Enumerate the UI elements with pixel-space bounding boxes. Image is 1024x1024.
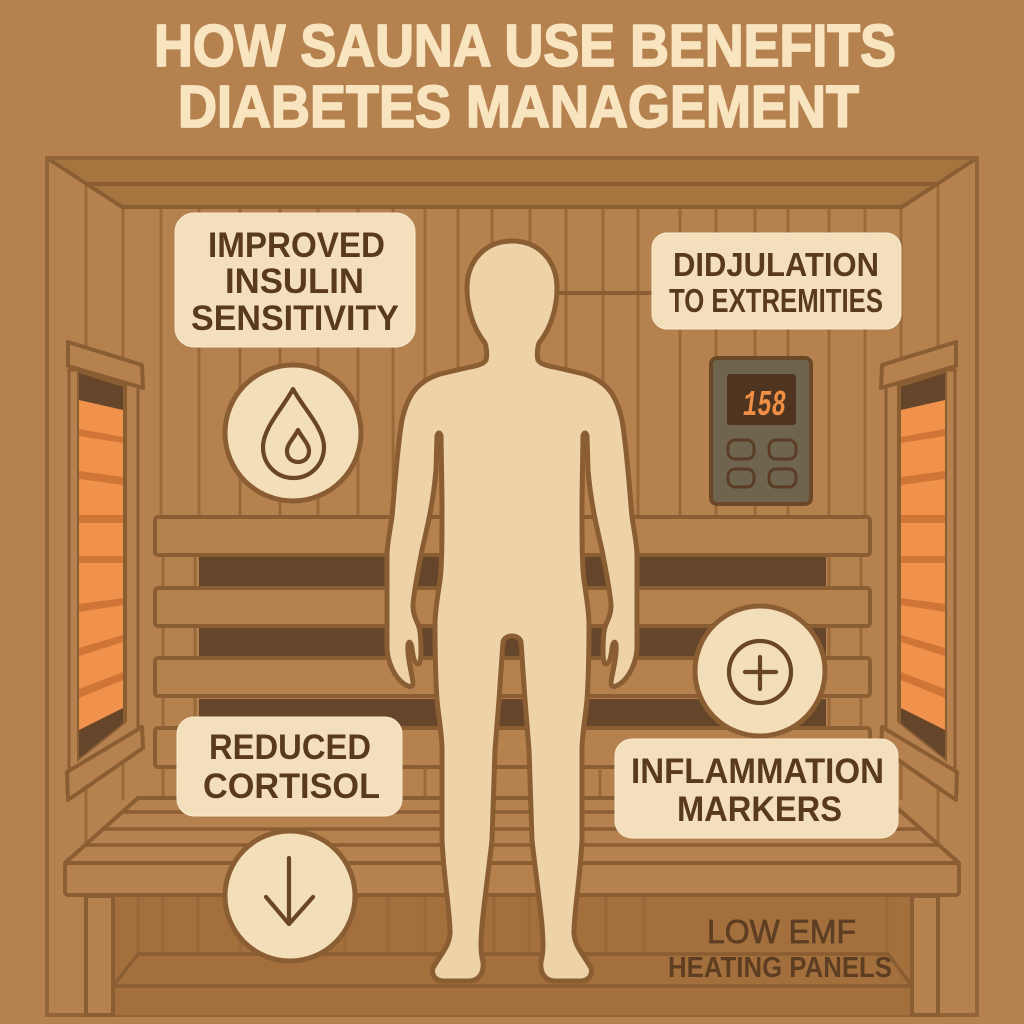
under-bench area <box>86 896 938 1015</box>
callout: improved insulin sensitivity: SENSITIVITY <box>191 299 399 338</box>
side walls <box>86 184 938 1015</box>
right heating panel <box>881 342 957 800</box>
callout: improved insulin sensitivity <box>175 213 415 347</box>
icon: water drop <box>225 365 361 501</box>
back wall <box>122 207 902 802</box>
callout: inflammation markers: INFLAMMATION <box>631 752 884 791</box>
wall benches <box>155 517 870 800</box>
icon: plus in circle <box>695 606 825 736</box>
sauna room <box>47 158 977 1015</box>
callout: reduced cortisol: CORTISOL <box>203 767 380 806</box>
sauna thermostat control panel <box>711 358 811 504</box>
title: DIABETES MANAGEMENT <box>178 74 859 140</box>
sauna thermostat control panel: 158 <box>743 385 786 426</box>
callout: reduced cortisol: REDUCED <box>209 728 371 767</box>
floor bench <box>65 798 959 895</box>
callout: improved insulin sensitivity: IMPROVED <box>208 226 385 265</box>
ceiling <box>47 158 977 207</box>
outer frame <box>47 158 977 1015</box>
callout: improved insulin sensitivity: INSULIN <box>225 262 364 301</box>
callout: didjulation to extremities: DIDJULATION <box>673 246 879 283</box>
icon: down arrow <box>225 831 355 961</box>
low EMF label <box>668 913 892 984</box>
low EMF label: HEATING PANELS <box>668 952 892 984</box>
left heating panel <box>67 342 143 800</box>
human silhouette <box>387 241 637 981</box>
connector line <box>556 291 654 295</box>
callout: reduced cortisol <box>177 717 402 816</box>
title: HOW SAUNA USE BENEFITS <box>154 13 896 79</box>
callout: inflammation markers <box>615 739 898 838</box>
low EMF label: LOW EMF <box>707 913 856 950</box>
title <box>154 13 896 140</box>
callout: didjulation to extremities <box>652 233 901 329</box>
callout: didjulation to extremities: TO EXTREMITIES <box>669 282 883 319</box>
callout: inflammation markers: MARKERS <box>677 790 842 829</box>
